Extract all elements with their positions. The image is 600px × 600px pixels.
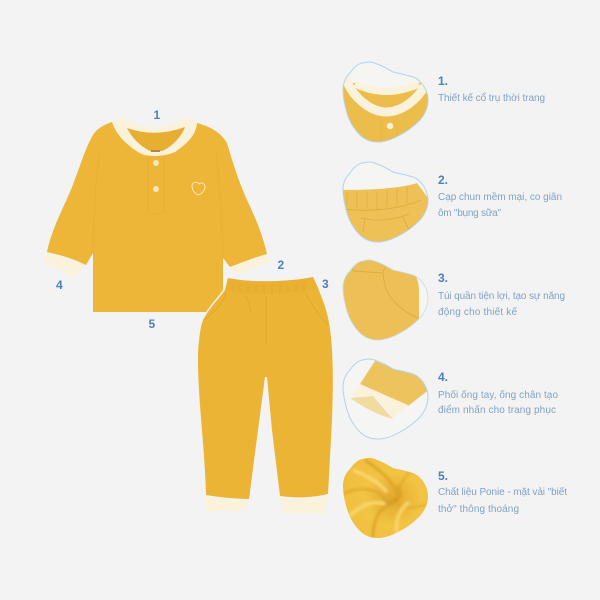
heart logo [192,182,205,195]
feature 3 text [438,271,565,318]
feature 3 text: động cho thiết kế [438,306,517,318]
pocket seam [351,266,418,318]
shirt body [47,122,267,312]
button [387,123,393,129]
feature 4: cuff heart [342,358,428,440]
neck tag [151,150,160,152]
feature 5: fabric swirl heart [343,458,428,538]
cuff opening [350,396,393,419]
seam lines [341,200,421,232]
feature 4 text: Phối ống tay, ống chân tạo [438,389,558,401]
feature 5 text: thở" thông thoáng [438,503,519,515]
waistband gathers [232,282,304,294]
feature 2 text [438,173,562,219]
feature 4 text: điểm nhấn cho trang phục [438,404,556,416]
feature 2: waistband heart [342,162,428,242]
callout numbers on garment [56,108,329,331]
feature 1 text: 1. [438,74,448,88]
front collar band [346,79,427,112]
pants waistband [225,277,318,294]
feature 5 text: 5. [438,469,448,483]
neck opening [346,62,420,88]
feature 1 text [438,74,545,104]
callout numbers on garment: 3 [322,277,329,291]
feature 3 text: Túi quần tiện lợi, tạo sự năng [438,290,565,302]
feature 4 text: 4. [438,370,448,384]
callout numbers on garment: 5 [148,317,156,331]
feature 4 text [438,370,558,416]
feature 3 text: 3. [438,271,448,285]
placket [148,156,164,214]
feature 2 text: Cạp chun mềm mại, co giãn [438,191,562,203]
feature 2 text: 2. [438,173,448,187]
feature 3: pocket heart [342,260,428,340]
pants body [198,277,333,499]
waistband fabric [344,183,428,242]
sleeve seams [93,150,223,258]
pants right ankle cuff [280,492,328,513]
sleeve [360,361,430,406]
swirl folds [343,460,427,538]
callout numbers on garment: 2 [278,258,284,272]
callout numbers on garment: 1 [154,108,160,122]
back collar band [355,84,419,92]
shirt right cuff [230,254,269,275]
shirt collar [112,117,197,156]
pocket seams [203,293,328,345]
feature 1: collar heart [342,62,428,142]
feature 1 text: Thiết kế cổ trụ thời trang [438,92,545,104]
feature 5 text: Chất liệu Ponie - mặt vải "biết [438,486,567,498]
shirt left cuff [44,252,86,277]
pants fabric [341,258,419,344]
callout numbers on garment: 4 [56,278,63,292]
feature 2 text: ôm "bụng sữa" [438,208,501,219]
shirt buttons [153,160,159,192]
cuff [350,384,408,419]
feature 5 text [438,469,567,515]
pants illustration [198,277,333,513]
shirt inner neck [127,127,185,151]
gathers [347,187,407,209]
pants left ankle cuff [205,494,249,511]
shirt illustration [44,117,269,312]
